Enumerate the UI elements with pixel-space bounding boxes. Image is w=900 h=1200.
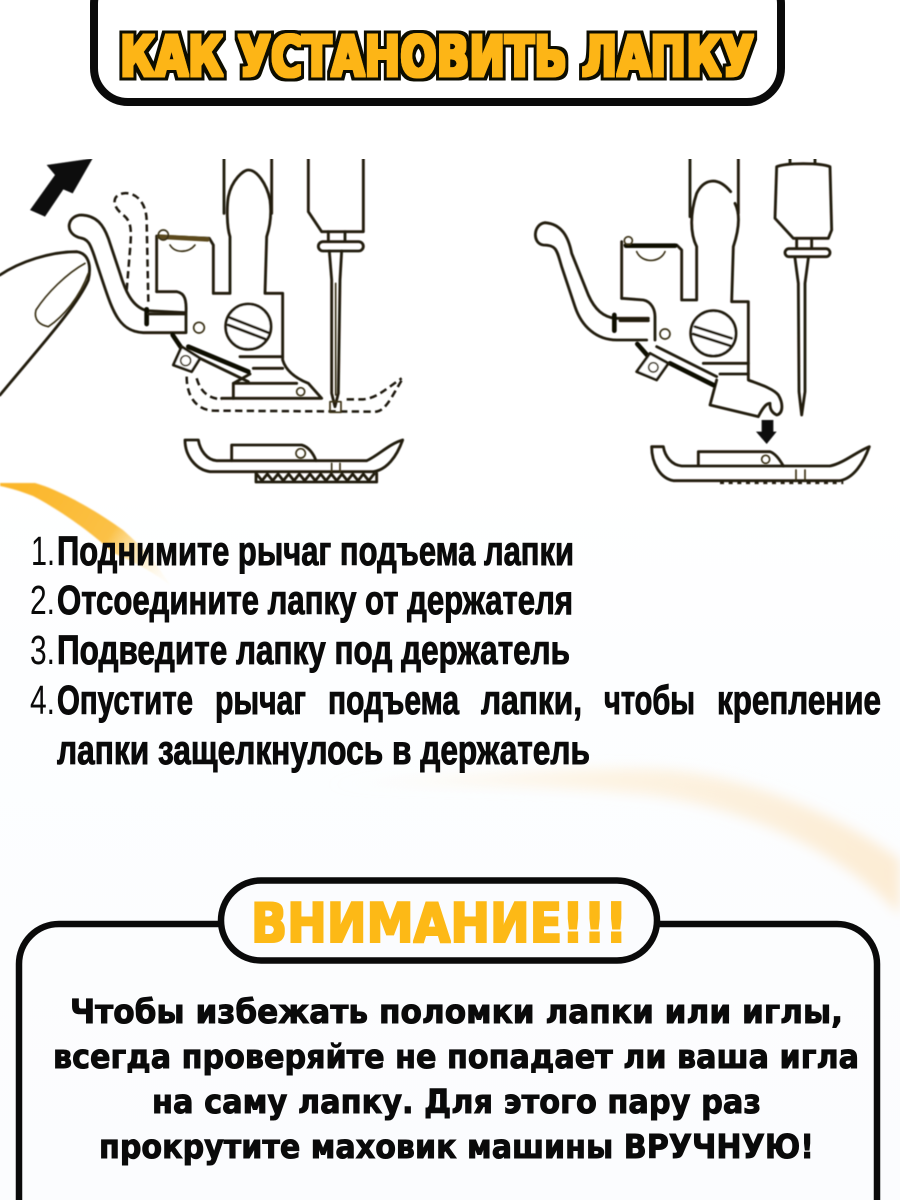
warning text: на саму лапку. Для этого пару раз: [152, 1082, 761, 1121]
step 3: 3.: [30, 627, 55, 673]
decorative swoosh: cream arc: [320, 769, 900, 915]
foot holder: [157, 159, 322, 398]
foot holder with shank: [622, 159, 782, 417]
step 4: подъема: [328, 677, 460, 723]
warning panel: [19, 880, 877, 1200]
step 1: Поднимите рычаг подъема лапки: [57, 528, 574, 574]
decorative swoosh: yellow arc: [0, 483, 170, 585]
presser foot lever: [69, 215, 185, 333]
warning heading pill: ВНИМАНИЕ!!!: [251, 892, 627, 955]
step 4: рычаг: [215, 677, 306, 723]
presser foot: [652, 447, 869, 483]
step 2: Отсоедините лапку от держателя: [57, 577, 573, 623]
step 4: 4.: [30, 677, 55, 723]
icon: finger: [0, 252, 90, 395]
presser foot lever: [535, 223, 648, 340]
warning text: [53, 992, 859, 1166]
step 1: 1.: [31, 528, 55, 574]
illustration: bringing the foot under the holder: [535, 159, 869, 483]
step 4: Опустите: [57, 677, 193, 723]
detached presser foot: [185, 440, 403, 482]
step 4: [30, 677, 881, 773]
dashed raised lever: [115, 193, 148, 302]
warning text: Чтобы избежать поломки лапки или иглы,: [70, 992, 843, 1031]
icon: up arrow: [30, 158, 93, 217]
step 3: Подведите лапку под держатель: [57, 627, 570, 673]
step 2: 2.: [30, 577, 55, 623]
warning text: прокрутите маховик машины ВРУЧНУЮ!: [99, 1127, 814, 1166]
title panel: [94, 0, 781, 102]
needle: [775, 159, 832, 415]
needle: [308, 159, 363, 412]
step 4: лапки,: [481, 677, 582, 723]
step 4: чтобы: [604, 677, 695, 723]
icon: down arrow: [756, 420, 777, 444]
dashed lowered foot: [187, 377, 403, 412]
step 4: лапки защелкнулось в держатель: [57, 727, 590, 773]
instruction list: [30, 528, 881, 773]
illustration: lifting the lever and detaching the foot: [0, 158, 403, 482]
